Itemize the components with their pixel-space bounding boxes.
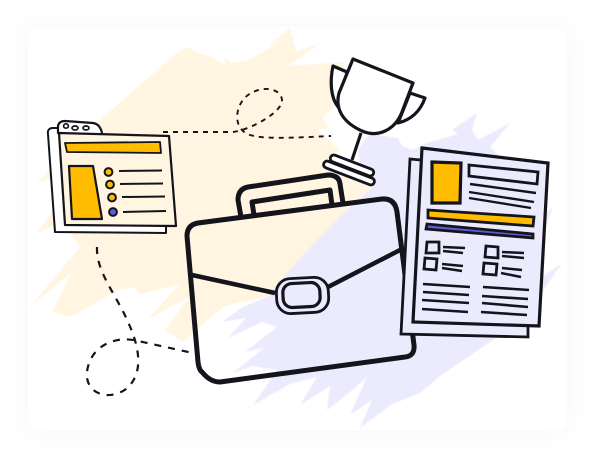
list lines <box>119 170 166 212</box>
list bullets <box>105 168 117 216</box>
icon: trophy <box>323 59 425 186</box>
checkboxes <box>424 242 498 275</box>
blue bar <box>426 224 533 238</box>
blue brush blob <box>222 113 562 428</box>
clasp <box>276 277 329 314</box>
window tab <box>58 121 102 133</box>
title box <box>469 165 538 184</box>
cup <box>338 59 413 134</box>
front window <box>59 133 176 226</box>
bottom text lines <box>422 284 529 315</box>
flap right <box>328 249 402 287</box>
clasp inner <box>282 282 321 308</box>
yellow bar <box>428 210 534 226</box>
icon: briefcase <box>187 175 414 382</box>
yellow brush blob <box>30 28 373 342</box>
back page <box>401 159 528 337</box>
icon: browser window <box>48 121 176 233</box>
photo <box>432 162 461 203</box>
panel: background card <box>28 27 567 431</box>
handle <box>238 175 343 217</box>
icon: documents <box>401 148 548 337</box>
flap left <box>192 275 275 293</box>
tab dots <box>64 124 89 130</box>
dashed path: bottom <box>87 247 193 395</box>
front page <box>413 148 548 326</box>
header bar <box>65 142 161 153</box>
base top <box>329 154 375 177</box>
image block <box>69 166 102 219</box>
dashed path: top <box>163 89 331 138</box>
checkbox lines <box>442 247 524 277</box>
right handle <box>398 93 425 123</box>
back window <box>48 128 166 233</box>
handle inner <box>252 190 332 215</box>
left handle <box>331 66 347 108</box>
text lines <box>469 184 536 208</box>
case body <box>187 199 414 382</box>
base bottom <box>323 160 375 186</box>
stem <box>352 133 361 160</box>
